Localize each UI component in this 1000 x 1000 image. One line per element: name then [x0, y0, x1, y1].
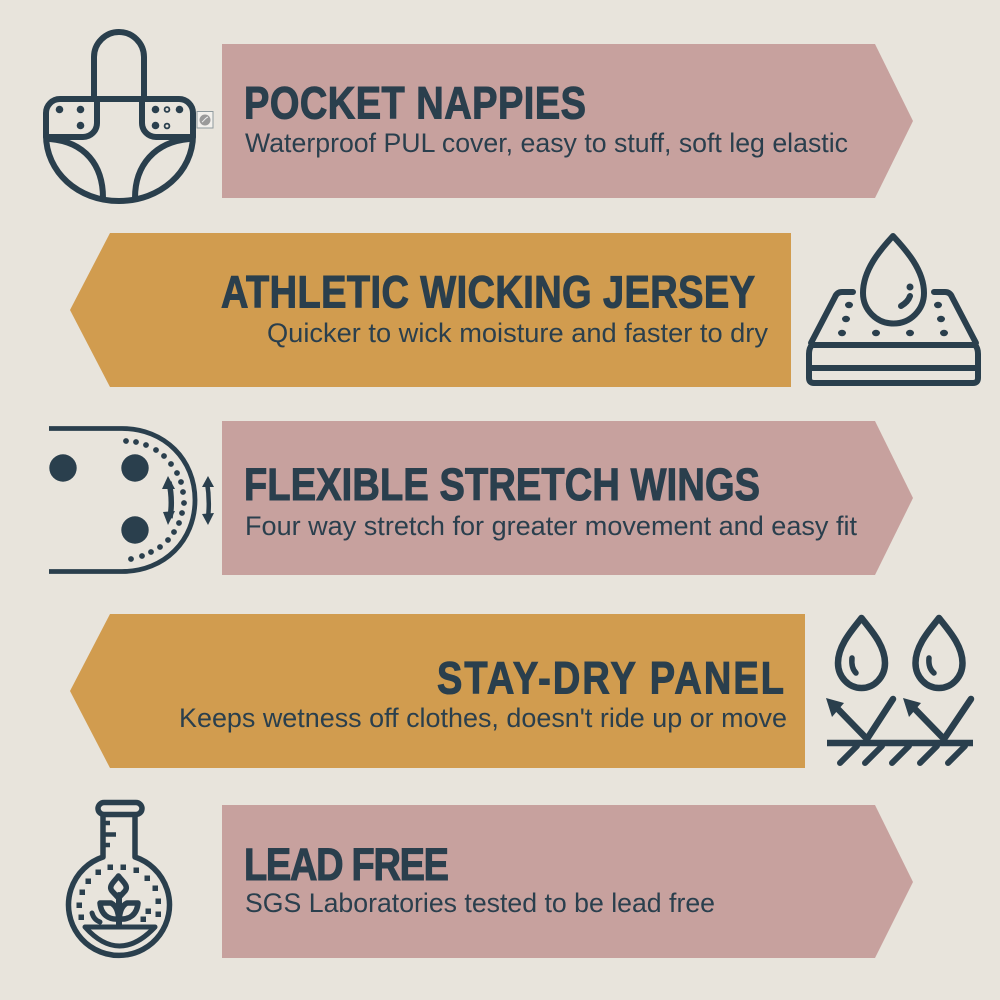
- heading: pocket nappies: POCKET NAPPIES: [244, 77, 586, 128]
- panel: pocket nappies: [222, 44, 913, 198]
- text: lead free description: SGS Laboratories tested to be lead free: [245, 888, 715, 918]
- text: wings description: Four way stretch for greater movement and easy fit: [245, 511, 857, 541]
- text: jersey description: Quicker to wick moisture and faster to dry: [267, 318, 768, 348]
- icon: diaper: [46, 32, 193, 201]
- panel: athletic wicking jersey: [70, 233, 791, 387]
- icon: small image badge: [197, 112, 213, 128]
- text: stay-dry description: Keeps wetness off clothes, doesn't ride up or move: [179, 703, 787, 733]
- panel: flexible stretch wings: [222, 421, 913, 575]
- icon: flask with plant: [68, 802, 170, 955]
- heading: flexible stretch wings: FLEXIBLE STRETCH WINGS: [244, 459, 760, 510]
- panel: lead free: [222, 805, 913, 958]
- icon: stretch wing: [49, 428, 214, 572]
- heading: stay-dry panel: STAY-DRY PANEL: [437, 652, 784, 703]
- icon: moisture repelling drops: [826, 618, 973, 763]
- heading: lead free: LEAD FREE: [244, 839, 449, 890]
- icon: water drop on mattress: [809, 236, 978, 383]
- heading: athletic wicking jersey: ATHLETIC WICKING JERSEY: [221, 266, 755, 317]
- panel: stay-dry panel: [70, 614, 805, 768]
- text: pocket nappies description: Waterproof PUL cover, easy to stuff, soft leg elastic: [245, 128, 848, 158]
